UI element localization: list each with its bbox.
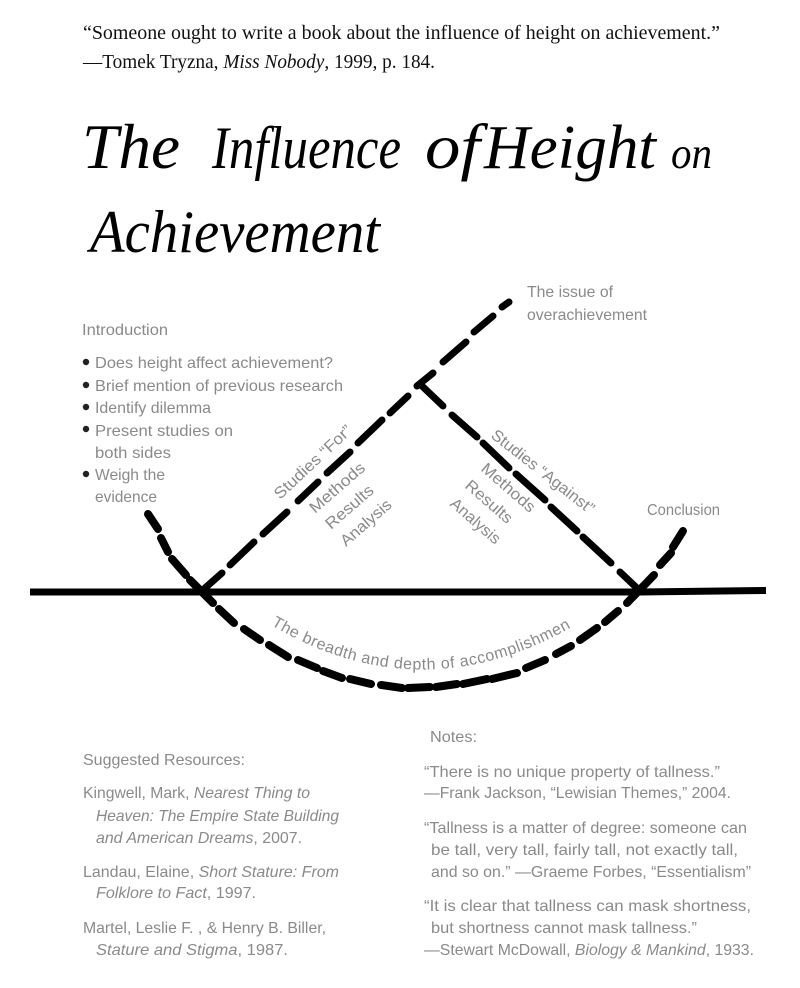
suggested resources: Heaven: The Empire State Building <box>96 808 339 825</box>
suggested resources: and American Dreams, 2007. <box>96 830 302 847</box>
notes: Notes: <box>430 729 477 746</box>
labels: studies for: Results <box>322 482 377 533</box>
title: of <box>425 111 489 182</box>
label: conclusion: Conclusion <box>647 502 720 519</box>
title: Influence <box>211 115 401 181</box>
notes: —Frank Jackson, “Lewisian Themes,” 2004. <box>424 785 731 802</box>
introduction text block: Present studies on <box>95 423 233 440</box>
introduction text block: Identify dilemma <box>95 400 211 417</box>
suggested resources: Kingwell, Mark, Nearest Thing to <box>83 785 310 802</box>
title: Height <box>483 114 658 182</box>
introduction text block: Introduction <box>82 322 168 339</box>
dashed curve: introduction through breadth arc to conclusion <box>148 514 683 688</box>
curved label: breadth and depth of accomplishment: The breadth and depth of accomplishment <box>274 616 570 673</box>
notes: “It is clear that tallness can mask shortness, <box>424 898 751 915</box>
labels: studies against <box>446 427 597 548</box>
introduction text block: both sides <box>95 445 171 462</box>
dashed line: studies against, falling to conclusion <box>422 386 639 590</box>
labels: studies for: Methods <box>306 460 369 517</box>
labels: studies for <box>271 422 395 550</box>
suggested resources: Suggested Resources: <box>83 752 245 769</box>
notes: “There is no unique property of tallness.” <box>424 764 720 781</box>
notes <box>424 729 754 959</box>
introduction text block <box>82 322 343 506</box>
introduction text block: Does height affect achievement? <box>95 355 333 372</box>
suggested resources: Stature and Stigma , 1987. <box>96 942 288 959</box>
notes: and so on.” —Graeme Forbes, “Essentialism” <box>431 864 751 881</box>
introduction text block: Weigh the <box>95 467 165 484</box>
labels: studies for: Analysis <box>337 497 395 550</box>
title: Achievement <box>86 199 381 265</box>
epigraph quote: “Someone ought to write a book about the influence of height on achievement.” <box>83 23 720 44</box>
title: on <box>671 129 712 178</box>
labels: studies against: Studies “Against” <box>488 427 597 518</box>
suggested resources: Landau, Elaine, Short Stature: From <box>83 864 339 881</box>
dashed line: studies for, rising to the issue of overachievement <box>205 302 509 588</box>
label: the issue of overachievement: The issue of <box>527 284 614 301</box>
introduction text block: Brief mention of previous research <box>95 378 343 395</box>
title: The <box>82 111 180 182</box>
notes: but shortness cannot mask tallness.” <box>431 920 697 937</box>
epigraph quote <box>82 23 720 73</box>
label: the issue of overachievement: overachievement <box>527 307 648 324</box>
curved label: breadth and depth of accomplishment <box>274 616 570 673</box>
notes: be tall, very tall, fairly tall, not exactly tall, <box>431 842 738 859</box>
labels: studies against: Results <box>461 477 516 527</box>
horizontal achievement line <box>30 590 766 592</box>
labels: studies against: Methods <box>477 460 538 516</box>
labels: studies against: Analysis <box>446 495 504 548</box>
suggested resources: Martel, Leslie F. , & Henry B. Biller, <box>83 920 326 937</box>
label: the issue of overachievement <box>527 284 648 324</box>
notes: —Stewart McDowall, Biology & Mankind, 1933. <box>424 942 754 959</box>
epigraph quote: —Tomek Tryzna, Miss Nobody, 1999, p. 184. <box>82 52 435 73</box>
introduction text block: evidence <box>95 489 157 506</box>
title <box>82 111 712 265</box>
suggested resources <box>83 752 339 959</box>
notes: “Tallness is a matter of degree: someone can <box>424 820 747 837</box>
labels: studies for: Studies “For” <box>271 422 356 503</box>
suggested resources: Folklore to Fact, 1997. <box>96 885 256 902</box>
